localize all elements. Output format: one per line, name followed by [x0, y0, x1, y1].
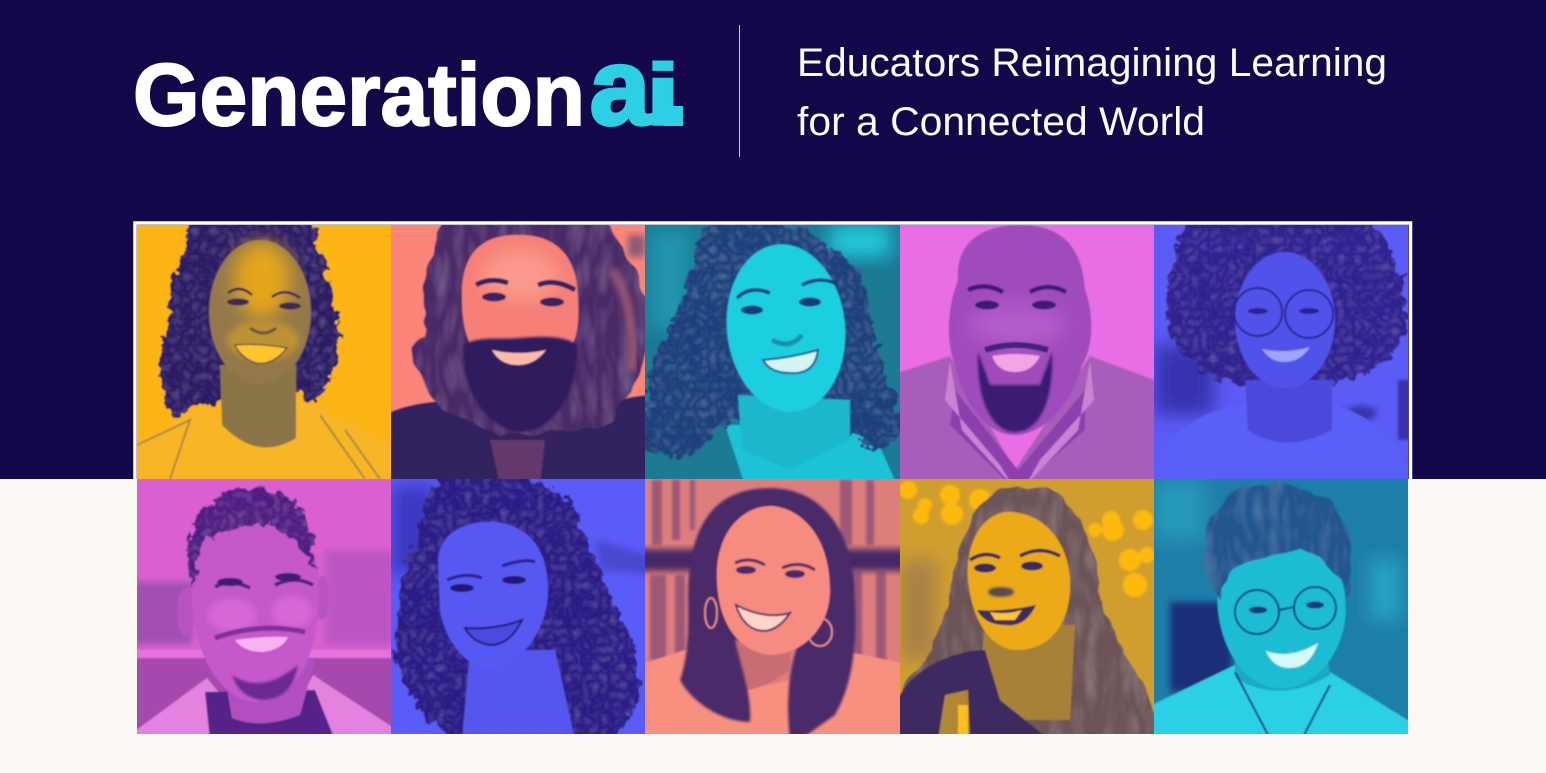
logo: Generation AI: [133, 26, 683, 147]
tagline: [797, 41, 1387, 144]
portrait 2: salmon: [391, 225, 645, 479]
tagline: Educators Reimagining Learning: [797, 41, 1387, 85]
earrings: [705, 598, 832, 646]
logo: Generation AI: Generation: [133, 45, 585, 144]
logo accent: ai: a: [590, 26, 651, 147]
portrait 4: pink: [894, 219, 1160, 485]
portrait 8: salmon bookshelf: [639, 473, 906, 740]
portrait 10: teal with glasses: [1148, 473, 1414, 740]
header background: [0, 0, 1546, 479]
portrait 6: magenta: [131, 473, 397, 740]
white frame around photo grid: [135, 223, 1410, 479]
portrait 5: violet blue: [1154, 225, 1408, 479]
logo accent: ai: i: [644, 45, 682, 144]
portrait 3: teal: [639, 217, 906, 485]
lower background: [0, 479, 1546, 773]
portrait 7: blue curly hair: [391, 479, 645, 734]
header divider: [739, 25, 740, 157]
bookshelf stripes: [650, 480, 886, 662]
portrait 1: yellow: [137, 225, 391, 479]
logo accent: ai: [590, 26, 683, 147]
tagline: for a Connected World: [797, 100, 1205, 144]
portrait 9: yellow with bokeh: [900, 479, 1154, 734]
bokeh lights: [899, 481, 1155, 597]
